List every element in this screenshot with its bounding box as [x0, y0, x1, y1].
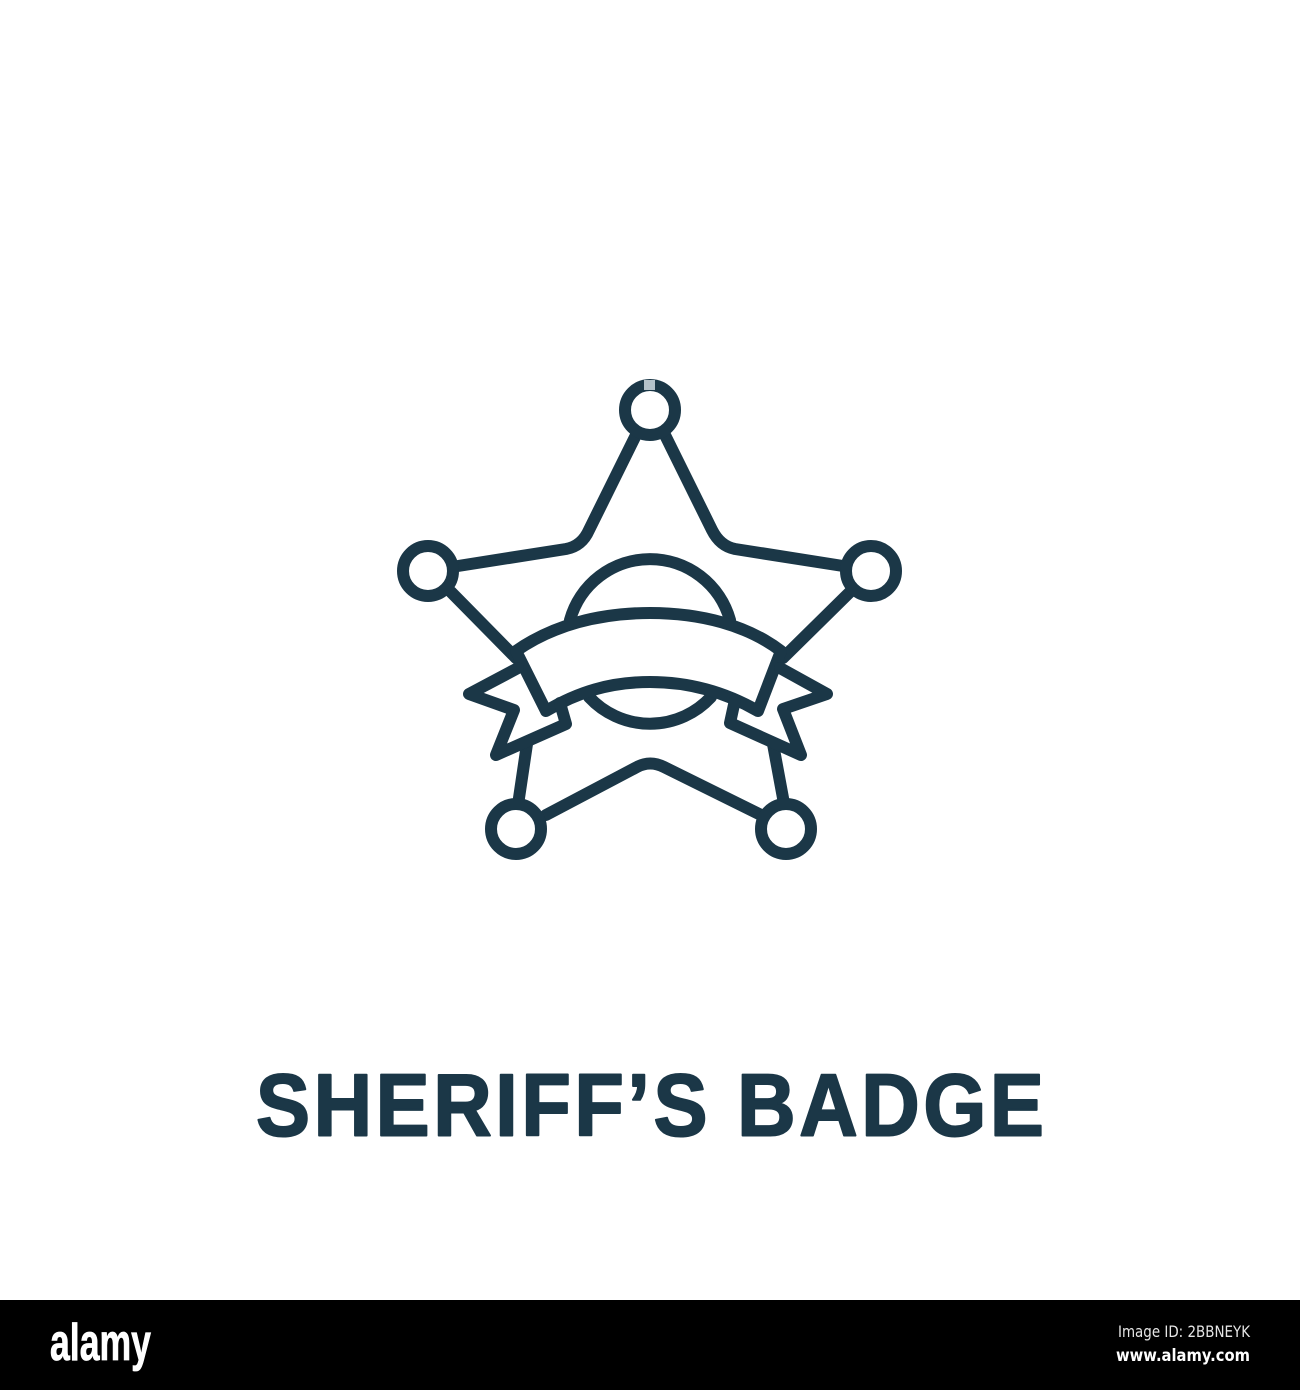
title: SHERIFF’S BADGE	[256, 1055, 1047, 1154]
footer logo: alamy	[50, 1314, 151, 1372]
image id: Image ID: 2BBNEYK	[1118, 1322, 1250, 1341]
footer bar	[0, 1300, 1300, 1390]
ribbon left tail	[469, 668, 566, 755]
ribbon right tail	[730, 668, 827, 755]
star point circles	[403, 385, 896, 854]
icon: sheriff's badge	[403, 385, 896, 854]
watermark speck	[644, 380, 655, 390]
ribbon banner	[516, 613, 781, 711]
star outline	[451, 435, 850, 815]
website: www.alamy.com	[1116, 1346, 1250, 1366]
central circle	[570, 559, 730, 724]
